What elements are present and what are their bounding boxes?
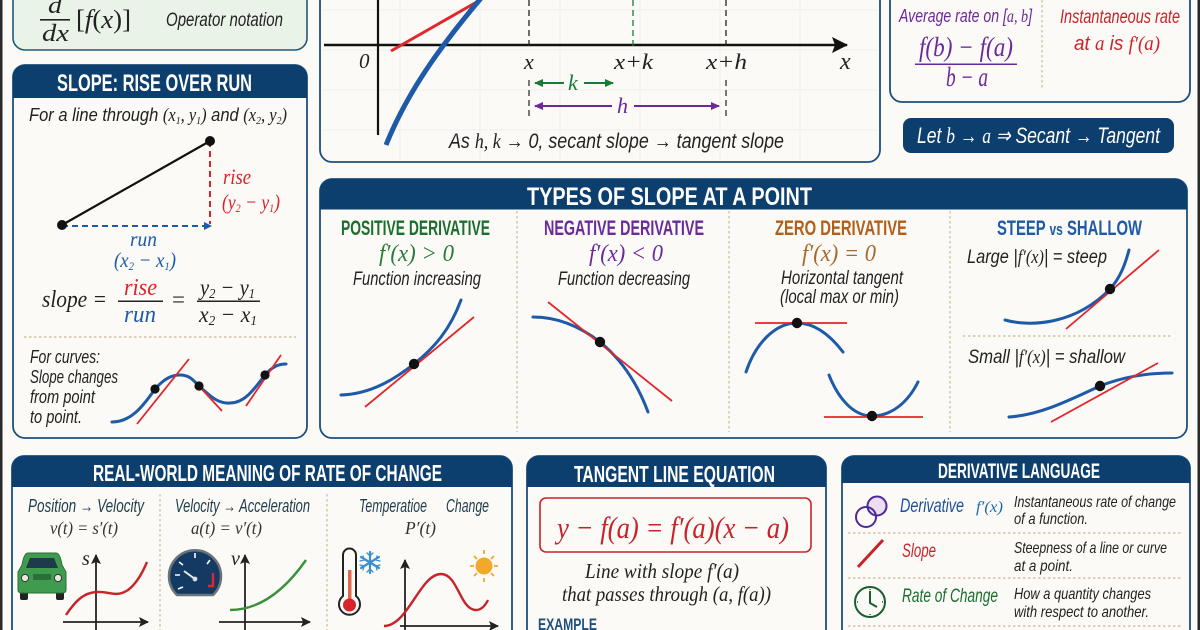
icon: overlapping circles <box>856 496 886 527</box>
formula box: tangent equation <box>540 498 811 552</box>
chart: function with secant lines: x+h <box>705 49 747 74</box>
intro text: 1 <box>196 115 201 127</box>
intro text: , <box>261 106 269 126</box>
panel: real-world meaning <box>12 456 512 630</box>
intro text: ) <box>281 106 287 126</box>
intro text: 1 <box>176 115 181 127</box>
chart: position curve: s <box>82 548 90 570</box>
formula: slope equals rise over run: slope = <box>42 287 107 313</box>
intro text: For a line through (x <box>29 104 177 126</box>
chart: function with secant lines: x <box>523 49 534 74</box>
icon: red slope line <box>858 540 883 567</box>
column: zero derivative: ZERO DERIVATIVE <box>775 217 907 240</box>
row: derivative: of a function. <box>1014 511 1088 528</box>
column: negative derivative: NEGATIVE DERIVATIVE <box>544 217 704 240</box>
diagram: rise over run triangle <box>57 136 280 273</box>
column: temperature change: Change <box>446 496 489 516</box>
diagram: rise over run triangle: run <box>130 227 157 251</box>
column: zero derivative: Horizontal tangent <box>781 268 904 289</box>
column: positive derivative <box>341 217 490 407</box>
row: slope: Slope <box>902 541 936 562</box>
callout: secant to tangent <box>903 118 1174 153</box>
heading: real-world meaning <box>12 456 512 487</box>
text: tangent description <box>562 559 771 606</box>
column: positive derivative: Function increasing <box>353 269 481 290</box>
chart: velocity curve <box>219 548 310 630</box>
text: for curves <box>30 347 118 427</box>
label: operator notation: Operator notation <box>166 10 283 31</box>
text: for curves: For curves: <box>30 347 100 367</box>
column: steep vs shallow: Large |f′(x)| = steep <box>967 247 1107 268</box>
column: velocity to acceleration: a(t) = v′(t) <box>191 518 262 539</box>
chart: curve with tangents <box>112 355 286 424</box>
intro text: ) <box>200 106 207 126</box>
diagram: rise over run triangle: 1 <box>269 201 274 215</box>
column: velocity to acceleration: Velocity → Acceleration <box>175 496 310 516</box>
heading: tangent line equation <box>527 456 826 487</box>
formula: slope equals rise over run: x <box>199 302 209 327</box>
formula: slope equals rise over run: 1 <box>250 314 257 329</box>
instantaneous rate <box>1060 7 1180 55</box>
column: position to velocity <box>18 496 148 630</box>
arrows: k and h intervals <box>529 70 726 118</box>
row: derivative: f′(x) <box>976 499 1003 516</box>
diagram: rise over run triangle: ) <box>273 190 280 214</box>
chart: function with secant lines: x <box>839 49 851 75</box>
formula: slope equals rise over run: = <box>172 287 185 312</box>
column: positive derivative: f′(x) > 0 <box>379 241 454 267</box>
instantaneous rate: at a is f′(a) <box>1074 33 1160 55</box>
formula: slope equals rise over run: 2 <box>209 287 215 302</box>
formula: slope equals rise over run <box>42 275 260 329</box>
column: positive derivative: POSITIVE DERIVATIVE <box>341 217 490 240</box>
chart: temperature curve <box>384 560 498 630</box>
column: negative derivative <box>533 217 704 412</box>
row: rate of change <box>855 586 1151 621</box>
diagram: rise over run triangle: 2 <box>129 259 134 273</box>
panel: derivative notation <box>13 0 307 50</box>
column: position to velocity: v(t) = s′(t) <box>50 518 118 539</box>
formula: operator notation: dx <box>42 21 69 47</box>
formula: slope equals rise over run: rise <box>124 275 157 301</box>
diagram: rise over run triangle: rise <box>223 164 251 189</box>
formula: slope equals rise over run: 1 <box>249 287 255 302</box>
heading: types of slope <box>320 179 1187 211</box>
panel: average and instantaneous rate <box>890 0 1190 102</box>
icon: clock <box>855 587 885 617</box>
row: derivative: Derivative <box>900 496 964 517</box>
intro text: 2 <box>277 115 282 127</box>
heading: types of slope: TYPES OF SLOPE AT A POINT <box>527 183 812 211</box>
column: steep vs shallow <box>963 217 1173 422</box>
row: slope <box>858 540 1167 575</box>
chart: function with secant lines: 0 <box>359 49 370 73</box>
text: for curves: Slope changes <box>30 367 118 387</box>
diagram: rise over run triangle: (y <box>222 190 237 214</box>
panel: secant and tangent graph <box>320 0 880 162</box>
row: derivative <box>856 494 1176 528</box>
text: tangent description: that passes through (a, f(a)) <box>562 582 771 606</box>
formula: slope equals rise over run: run <box>124 302 156 328</box>
formula: slope equals rise over run: y <box>240 275 250 300</box>
intro text: y <box>267 106 277 126</box>
heading: real-world meaning: REAL-WORLD MEANING OF RATE OF CHANGE <box>93 460 442 486</box>
arrows: k and h intervals: h <box>617 93 628 118</box>
icon: thermometer <box>339 549 360 615</box>
formula: slope equals rise over run: 2 <box>209 314 215 329</box>
column: zero derivative: f′(x) = 0 <box>802 241 876 267</box>
heading: derivative language: DERIVATIVE LANGUAGE <box>938 460 1100 483</box>
column: position to velocity: Position → Velocity <box>28 496 145 516</box>
row: slope: at a point. <box>1014 558 1073 575</box>
chart: velocity curve: v <box>231 548 240 570</box>
average rate <box>898 6 1033 92</box>
intro text: y <box>187 106 197 126</box>
heading: slope: SLOPE: RISE OVER RUN <box>57 70 252 97</box>
icon: snowflake <box>360 552 380 573</box>
column: temperature change: Temperatioe <box>359 496 427 516</box>
formula: operator notation: [f(x)] <box>76 5 131 34</box>
formula: slope equals rise over run: y <box>200 275 210 300</box>
diagram: rise over run triangle: y <box>261 190 271 214</box>
icon: green car <box>18 553 66 600</box>
column: zero derivative: (local max or min) <box>780 287 899 308</box>
column: temperature change <box>339 496 498 630</box>
arrows: k and h intervals: k <box>568 70 579 95</box>
row: rate of change: Rate of Change <box>902 586 998 607</box>
diagram: rise over run triangle: 1 <box>164 259 170 273</box>
row: rate of change: with respect to another. <box>1014 604 1149 621</box>
heading: tangent line equation: TANGENT LINE EQUATION <box>574 461 775 487</box>
average rate: f(b) − f(a) <box>919 32 1013 62</box>
formula box: tangent equation: y − f(a) = f′(a)(x − a) <box>554 510 789 545</box>
column: negative derivative: Function decreasing <box>558 269 690 290</box>
average rate: b − a <box>946 62 988 92</box>
column: negative derivative: f′(x) < 0 <box>589 241 663 267</box>
intro text: , <box>181 106 189 126</box>
caption: limit statement: As h, k → 0, secant slope → tangent slope <box>447 129 784 153</box>
row: rate of change: How a quantity changes <box>1014 586 1151 603</box>
text: for curves: to point. <box>30 407 82 427</box>
column: zero derivative <box>746 217 923 421</box>
panel: slope rise over run <box>13 65 307 438</box>
icon: sun <box>470 550 498 582</box>
panel: tangent line equation <box>527 456 826 630</box>
diagram: rise over run triangle: − <box>241 190 261 214</box>
chart: function with secant lines <box>324 0 851 145</box>
column: steep vs shallow: Small |f′(x)| = shallow <box>968 347 1126 368</box>
average rate: Average rate on [a, b] <box>898 6 1033 26</box>
formula: slope equals rise over run: x <box>241 302 251 327</box>
diagram: rise over run triangle: (x <box>114 248 130 272</box>
panel: types of slope at a point <box>320 179 1187 438</box>
diagram: rise over run triangle: ) <box>169 248 176 272</box>
icon: speedometer <box>169 550 221 595</box>
formula: operator notation <box>40 0 131 47</box>
diagram: rise over run triangle: 2 <box>236 201 241 215</box>
chart: function with secant lines: x+k <box>613 49 654 74</box>
text: for curves: from point <box>30 387 96 407</box>
panel: derivative language <box>842 456 1190 630</box>
intro text: 2 <box>256 115 261 127</box>
diagram: rise over run triangle: − <box>134 248 156 272</box>
diagram: rise over run triangle: x <box>156 248 165 272</box>
formula: slope equals rise over run: − <box>215 275 240 300</box>
column: velocity to acceleration <box>169 496 310 630</box>
text: tangent description: Line with slope f′(a) <box>584 559 739 583</box>
heading: slope <box>13 65 307 98</box>
column: steep vs shallow: STEEP vs SHALLOW <box>997 217 1142 240</box>
intro text: and (x <box>212 104 257 126</box>
column: temperature change: P′(t) <box>404 518 436 539</box>
heading: derivative language <box>842 456 1190 483</box>
formula: slope equals rise over run: − <box>215 302 241 327</box>
callout: secant to tangent: Let b → a ⇒ Secant → Tangent <box>917 123 1161 148</box>
